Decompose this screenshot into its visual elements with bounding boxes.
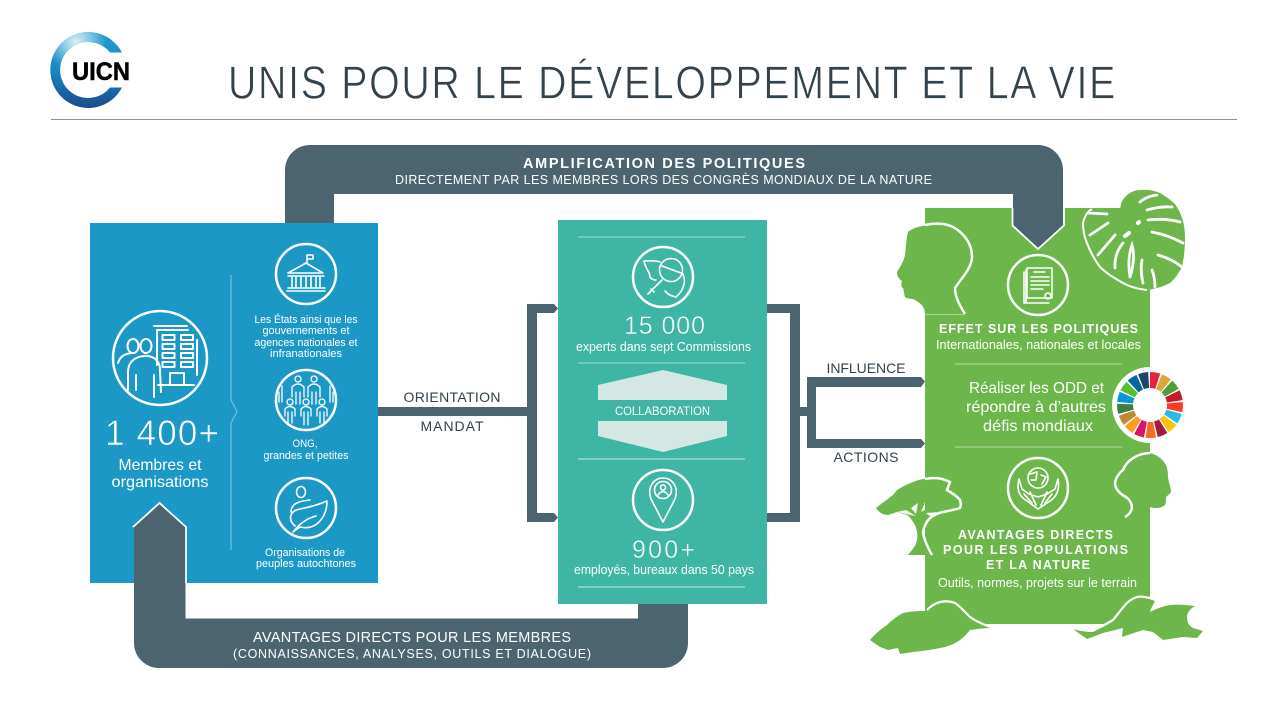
silhouette: man head bbox=[897, 224, 972, 314]
text: NGOs: grandes et petites bbox=[264, 450, 349, 462]
text: NGOs bbox=[264, 438, 349, 462]
logo: UICN bbox=[50, 32, 130, 108]
staff label: employés, bureaux dans 50 pays bbox=[574, 562, 754, 577]
band text: AVANTAGES DIRECTS POUR LES MEMBRES bbox=[253, 630, 571, 646]
icon: indigenous peoples leaf bbox=[276, 478, 336, 538]
arrow: policy amplification bbox=[285, 145, 1064, 249]
panel: blue members bbox=[90, 223, 378, 583]
label: mandate: MANDAT bbox=[420, 418, 484, 434]
text: states bbox=[254, 313, 358, 360]
header rule bbox=[51, 119, 1237, 120]
heading: direct benefits: ET LA NATURE bbox=[986, 558, 1090, 572]
divider with chevron bbox=[231, 275, 237, 550]
text: states: agences nationales et bbox=[254, 337, 358, 349]
silhouette: woman head bbox=[1115, 453, 1171, 520]
arrow: policy amplification: DIRECTEMENT PAR LES MEMBRES LORS DES CONGRÈS MONDIAUX DE LA NATURE bbox=[395, 172, 932, 187]
heading: policy effect: EFFET SUR LES POLITIQUES bbox=[939, 322, 1138, 336]
icon: leaf and magnifier bbox=[633, 247, 693, 307]
members label: Membres et bbox=[118, 457, 202, 474]
silhouette: tree bbox=[876, 478, 961, 555]
icon: SDG wheel bbox=[1112, 367, 1188, 443]
text: indigenous organisations: peuples autochtones bbox=[256, 558, 356, 570]
collaboration arrows: COLLABORATION bbox=[615, 406, 710, 418]
members count: 1 400+ bbox=[105, 414, 219, 453]
icon: people and building bbox=[113, 311, 207, 405]
text: indigenous organisations bbox=[256, 547, 356, 570]
text: NGOs: ONG, bbox=[292, 438, 318, 450]
icon: location pin bbox=[633, 470, 693, 530]
silhouette: bottom left leaf bbox=[870, 601, 993, 654]
text: SDG goal: défis mondiaux bbox=[983, 418, 1093, 435]
text: states: gouvernements et bbox=[262, 325, 350, 337]
band text: AMPLIFICATION DES POLITIQUES bbox=[523, 156, 805, 172]
experts count: 15 000 bbox=[624, 312, 705, 340]
text: states: Les États ainsi que les bbox=[254, 313, 358, 326]
connector: influence and actions bracket bbox=[767, 304, 925, 522]
text: indigenous organisations: Organisations de bbox=[265, 547, 345, 559]
icon: policy document bbox=[1008, 255, 1068, 315]
heading: direct benefits: AVANTAGES DIRECTS bbox=[958, 528, 1113, 542]
icon: NGO crowd bbox=[276, 370, 336, 430]
arrow: direct benefits for members: (CONNAISSANCES, ANALYSES, OUTILS ET DIALOGUE) bbox=[233, 647, 591, 661]
icon: government building bbox=[276, 244, 336, 304]
connector: orientation and mandate bracket bbox=[378, 304, 558, 522]
silhouette: monstera leaf bbox=[1083, 190, 1185, 290]
text: SDG goal: Réaliser les ODD et bbox=[969, 380, 1105, 397]
experts label: experts dans sept Commissions bbox=[576, 339, 751, 354]
silhouette: bottom right leaf bbox=[1073, 597, 1203, 640]
label: influence: INFLUENCE bbox=[826, 360, 906, 376]
label: orientation: ORIENTATION bbox=[404, 389, 500, 405]
title: UNIS POUR LE DÉVELOPPEMENT ET LA VIE bbox=[228, 56, 1117, 108]
logo: UICN: UICN bbox=[72, 58, 130, 86]
heading: direct benefits bbox=[943, 528, 1128, 572]
green panel contents bbox=[870, 190, 1203, 654]
panel: green outcomes bbox=[925, 208, 1150, 624]
text: states: infranationales bbox=[270, 348, 342, 360]
panel: teal secretariat bbox=[558, 220, 767, 604]
text: policy levels: Internationales, nationales et locales bbox=[936, 338, 1141, 352]
staff count: 900+ bbox=[632, 536, 695, 564]
icon: hands holding globe bbox=[1008, 458, 1068, 518]
arrow: direct benefits for members bbox=[133, 503, 688, 668]
members label: organisations bbox=[112, 474, 208, 491]
text: SDG goal bbox=[966, 380, 1106, 435]
collaboration arrows bbox=[598, 370, 727, 452]
text: SDG goal: répondre à d’autres bbox=[966, 399, 1106, 416]
heading: direct benefits: POUR LES POPULATIONS bbox=[943, 543, 1128, 557]
members label bbox=[112, 457, 208, 491]
label: actions: ACTIONS bbox=[834, 449, 898, 465]
text: tools and norms: Outils, normes, projets sur le terrain bbox=[938, 576, 1137, 590]
